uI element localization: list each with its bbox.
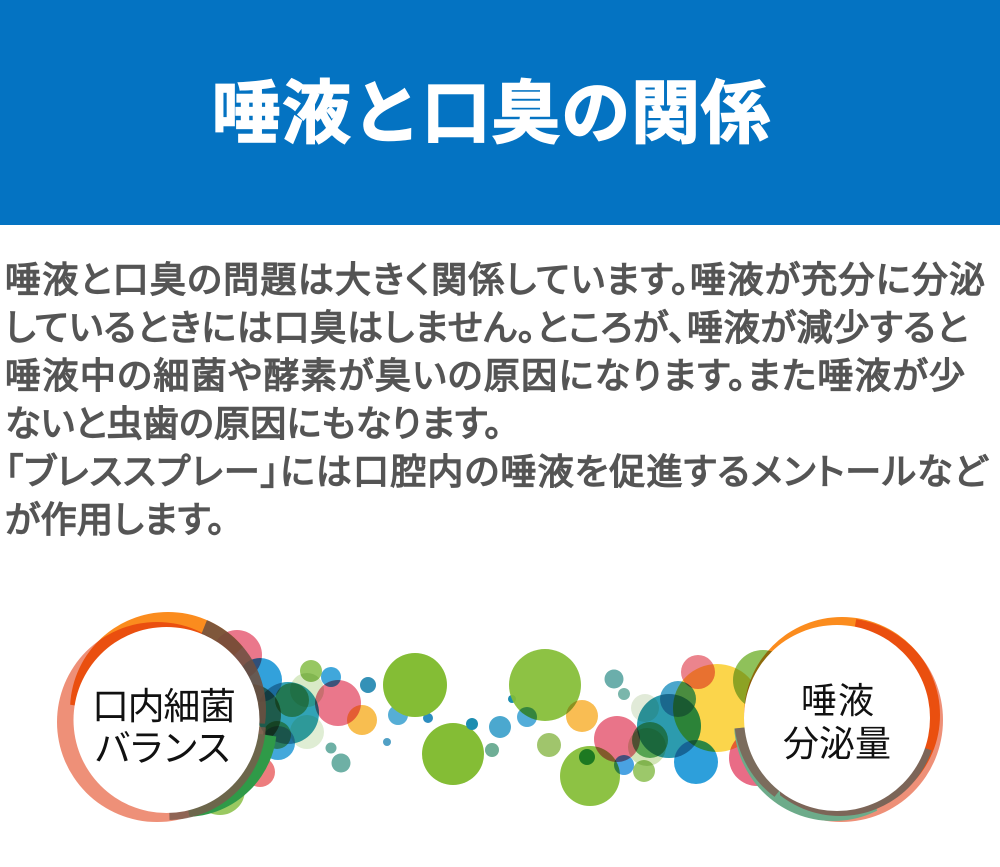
left bubbles	[195, 630, 433, 815]
text: バランス	[94, 728, 232, 769]
left ring	[57, 612, 281, 822]
body text: ないと虫歯の原因にもなります。	[5, 403, 502, 444]
body text: 「ブレススプレー」には口腔内の唾液を促進するメントールなど	[5, 451, 988, 492]
center bubbles	[383, 653, 516, 785]
bubble chain	[57, 612, 943, 822]
body text	[5, 259, 988, 540]
body text: 唾液と口臭の問題は大きく関係しています。唾液が充分に分泌	[5, 259, 985, 300]
body text: しているときには口臭はしません。ところが、唾液が減少すると	[5, 307, 968, 348]
title: 唾液と口臭の関係	[212, 75, 770, 152]
left label: 口内細菌	[92, 686, 236, 727]
body text: 唾液中の細菌や酵素が臭いの原因になります。また唾液が少	[5, 355, 965, 396]
header band	[0, 0, 1000, 225]
right label: 唾液	[801, 680, 874, 721]
body text: が作用します。	[5, 499, 225, 540]
right ring	[734, 615, 943, 822]
right bubbles	[509, 649, 793, 806]
text: 分泌量	[783, 723, 891, 764]
